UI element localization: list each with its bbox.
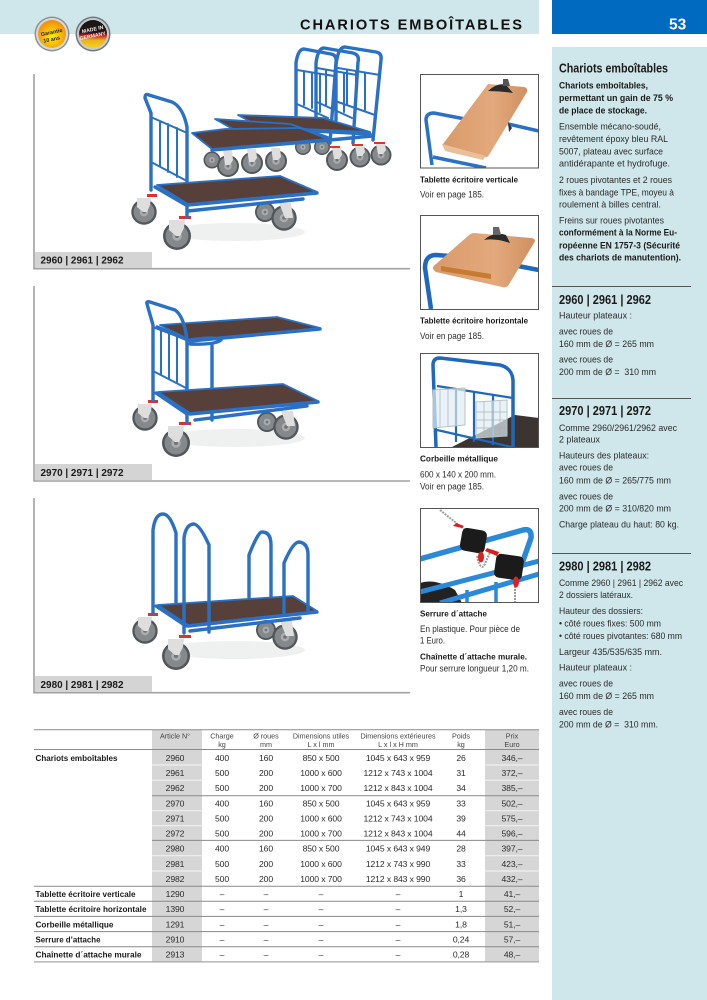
- title: CHARIOTS EMBOÎTABLES: [300, 15, 522, 33]
- table header: Dimensions extérieures: [360, 732, 436, 741]
- caption: horizontal tablet: [420, 316, 528, 341]
- table header: kg: [457, 740, 465, 749]
- table rows: –: [220, 934, 225, 944]
- side text: intro: des chariots de manutention).: [559, 253, 681, 264]
- table rows: 1212 x 843 x 1004: [363, 829, 433, 839]
- table rows: –: [264, 889, 269, 899]
- illustration: cart with side hoops: [132, 514, 317, 670]
- side section: 2980 2981 2982: Hauteur des dossiers:: [559, 606, 643, 617]
- row labels: Serrure d’attache: [36, 934, 101, 944]
- caption: vertical tablet: Tablette écritoire verticale: [420, 175, 518, 185]
- header band: [0, 0, 539, 34]
- thumbnail: coin lock: [421, 509, 538, 602]
- side section: 2960 2961 2962: avec roues de: [559, 327, 613, 338]
- table rows: 1,8: [455, 919, 467, 929]
- table rows: –: [264, 919, 269, 929]
- side text: intro: 2 roues pivotantes et 2 roues: [559, 175, 672, 186]
- table rows: 1000 x 600: [300, 814, 342, 824]
- table rows: 2961: [166, 768, 185, 778]
- table header: Charge: [210, 732, 234, 741]
- row labels: Chariots emboîtables: [36, 753, 118, 763]
- table rows: 372,–: [501, 768, 523, 778]
- table header: Poids: [452, 732, 470, 741]
- table rows: 200: [259, 859, 273, 869]
- caption: wire basket: 600 x 140 x 200 mm.: [420, 469, 496, 479]
- side section: 2960 2961 2962: 200 mm de Ø = 310 mm: [559, 367, 656, 378]
- price table: [34, 730, 539, 962]
- table header: L x l x H mm: [378, 740, 418, 749]
- table rows: 200: [259, 814, 273, 824]
- side text: intro: conformément à la Norme Eu-: [559, 228, 677, 239]
- table rows: 575,–: [501, 814, 523, 824]
- table rows: 500: [215, 859, 229, 869]
- label: 2970 2971 2972: 2970 | 2971 | 2972: [40, 467, 124, 479]
- table rows: [166, 753, 523, 960]
- table rows: 385,–: [501, 783, 523, 793]
- badge: made in Germany: MADE IN: [81, 25, 104, 35]
- table rows: 2971: [166, 814, 185, 824]
- table rows: 39: [456, 814, 466, 824]
- table rows: 1000 x 600: [300, 859, 342, 869]
- table rows: 1000 x 600: [300, 768, 342, 778]
- table rows: 57,–: [504, 934, 520, 944]
- table rows: 160: [259, 798, 273, 808]
- badge: guarantee 10 years: [34, 16, 70, 52]
- thumbnail: vertical writing tablet: [424, 79, 538, 168]
- table rows: 2972: [166, 829, 185, 839]
- side section: 2980 2981 2982: Largeur 435/535/635 mm.: [559, 647, 662, 658]
- side section: 2960 2961 2962: [552, 286, 691, 378]
- table rows: 31: [456, 768, 466, 778]
- table rows: 44: [456, 829, 466, 839]
- side section: 2980 2981 2982: 2980 | 2981 | 2982: [559, 560, 651, 574]
- side text: intro: Chariots emboîtables: [559, 62, 668, 76]
- table rows: 160: [259, 753, 273, 763]
- table rows: 0,28: [453, 950, 469, 960]
- table rows: 200: [259, 874, 273, 884]
- table rows: –: [220, 889, 225, 899]
- thumbnail: wire basket: [431, 356, 538, 447]
- caption: horizontal tablet: Tablette écritoire horizontale: [420, 316, 528, 326]
- table rows: 2970: [166, 798, 185, 808]
- thumbnail frame: [420, 354, 538, 448]
- caption: wire basket: Corbeille métallique: [420, 454, 498, 464]
- side section: 2970 2971 2972: avec roues de: [559, 463, 613, 474]
- side text: intro: ropéenne EN 1757-3 (Sécurité: [559, 240, 680, 251]
- side text: intro: permettant un gain de 75 %: [559, 93, 674, 104]
- table rows: 400: [215, 798, 229, 808]
- table header: [160, 732, 520, 749]
- table rows: –: [220, 919, 225, 929]
- page number tab: [552, 0, 707, 34]
- table rows: –: [396, 889, 401, 899]
- table rows: 1000 x 700: [300, 874, 342, 884]
- table rows: 500: [215, 814, 229, 824]
- side section: 2980 2981 2982: [552, 553, 691, 730]
- table header: kg: [218, 740, 226, 749]
- table rows: 400: [215, 844, 229, 854]
- table rows: 1212 x 743 x 1004: [363, 768, 433, 778]
- table rows: 2913: [166, 950, 185, 960]
- side section: 2980 2981 2982: • côté roues pivotantes: 680 mm: [559, 631, 682, 642]
- table rows: 1291: [166, 919, 185, 929]
- table header: Dimensions utiles: [293, 732, 350, 741]
- side section: 2960 2961 2962: avec roues de: [559, 354, 613, 365]
- table rows: 500: [215, 783, 229, 793]
- side text: intro: roulement à billes central.: [559, 199, 661, 210]
- row labels: Tablette écritoire verticale: [36, 889, 136, 899]
- row labels: Chaînette d´attache murale: [36, 950, 142, 960]
- table rows: 2962: [166, 783, 185, 793]
- table rows: 1000 x 700: [300, 783, 342, 793]
- table rows: 1212 x 743 x 990: [366, 859, 430, 869]
- panel: cart 2980 2981 2982: [34, 498, 410, 693]
- label: 2960 2961 2962: 2960 | 2961 | 2962: [40, 254, 124, 266]
- side section: 2980 2981 2982: 160 mm de Ø = 265 mm: [559, 691, 654, 702]
- table rows: 1212 x 743 x 1004: [363, 814, 433, 824]
- caption: coin lock and chain: En plastique. Pour pièce de: [420, 624, 520, 634]
- side text: intro: Freins sur roues pivotantes: [559, 215, 664, 226]
- thumbnail frame: [420, 216, 538, 310]
- table rows: 502,–: [501, 798, 523, 808]
- table rows: 596,–: [501, 829, 523, 839]
- table rows: 500: [215, 874, 229, 884]
- side section: 2960 2961 2962: 2960 | 2961 | 2962: [559, 293, 651, 307]
- table rows: –: [396, 950, 401, 960]
- side section: 2970 2971 2972: Comme 2960/2961/2962 avec: [559, 423, 677, 434]
- table rows: –: [319, 950, 324, 960]
- table rows: 0,24: [453, 934, 469, 944]
- label: 2980 2981 2982: [35, 676, 152, 692]
- table rows: 51,–: [504, 919, 520, 929]
- table rows: 160: [259, 844, 273, 854]
- side section: 2970 2971 2972: 200 mm de Ø = 310/820 mm: [559, 504, 671, 515]
- table rows: –: [264, 950, 269, 960]
- side section: 2980 2981 2982: Comme 2960 | 2961 | 2962 avec: [559, 578, 683, 589]
- table rows: 1212 x 843 x 990: [366, 874, 430, 884]
- caption: coin lock and chain: Serrure d´attache: [420, 609, 487, 619]
- table rows: 200: [259, 783, 273, 793]
- table rows: 48,–: [504, 950, 520, 960]
- side section: 2970 2971 2972: Charge plateau du haut: 80 kg.: [559, 520, 679, 531]
- table rows: 1,3: [455, 904, 467, 914]
- table rows: –: [396, 919, 401, 929]
- badge: made in Germany: GERMANY: [79, 31, 107, 42]
- table rows: –: [264, 934, 269, 944]
- side text: intro: de place de stockage.: [559, 105, 647, 116]
- badge: made in Germany: [76, 16, 110, 52]
- caption: vertical tablet: Voir en page 185.: [420, 190, 484, 200]
- side section: 2970 2971 2972: avec roues de: [559, 491, 613, 502]
- table header: Prix: [506, 732, 519, 741]
- table rows: –: [396, 904, 401, 914]
- table rows: –: [319, 889, 324, 899]
- caption: vertical tablet: [420, 175, 518, 200]
- table rows: 1: [459, 889, 464, 899]
- thumbnail frame: [420, 508, 538, 602]
- side text: intro: Ensemble mécano-soudé,: [559, 121, 661, 132]
- table rows: 41,–: [504, 889, 520, 899]
- table rows: 1045 x 643 x 949: [366, 844, 430, 854]
- table rows: 1290: [166, 889, 185, 899]
- side text: intro: 5007, plateau avec surface: [559, 146, 663, 157]
- side section: 2970 2971 2972: 2970 | 2971 | 2972: [559, 404, 651, 418]
- side section: 2970 2971 2972: Hauteurs des plateaux:: [559, 450, 649, 461]
- caption: wire basket: Voir en page 185.: [420, 481, 484, 491]
- table rows: 2910: [166, 934, 185, 944]
- side section: 2970 2971 2972: [552, 398, 691, 531]
- table rows: 52,–: [504, 904, 520, 914]
- side section: 2980 2981 2982: 2 dossiers latéraux.: [559, 590, 633, 601]
- side section: 2980 2981 2982: • côté roues fixes: 500 mm: [559, 619, 661, 630]
- side section: 2980 2981 2982: avec roues de: [559, 679, 613, 690]
- table rows: 432,–: [501, 874, 523, 884]
- table rows: 1000 x 700: [300, 829, 342, 839]
- caption: coin lock and chain: 1 Euro.: [420, 636, 445, 646]
- side text: intro: revêtement époxy bleu RAL: [559, 134, 668, 145]
- page number tab: 53: [669, 16, 687, 34]
- table rows: 500: [215, 768, 229, 778]
- label: 2980 2981 2982: 2980 | 2981 | 2982: [40, 679, 124, 691]
- thumbnail: horizontal writing tablet: [422, 227, 538, 309]
- table rows: 423,–: [501, 859, 523, 869]
- label: 2970 2971 2972: [35, 464, 152, 480]
- table rows: 200: [259, 829, 273, 839]
- table rows: 2980: [166, 844, 185, 854]
- side section: 2960 2961 2962: Hauteur plateaux :: [559, 311, 632, 322]
- table rows: 1045 x 643 x 959: [366, 753, 430, 763]
- side section: 2980 2981 2982: Hauteur plateaux :: [559, 663, 632, 674]
- table rows: 2982: [166, 874, 185, 884]
- panel: cart 2960 2961 2962: [34, 47, 410, 269]
- table rows: 34: [456, 783, 466, 793]
- side text: intro: antidérapante et hydrofuge.: [559, 159, 670, 170]
- table rows: 500: [215, 829, 229, 839]
- side text: intro: Chariots emboîtables,: [559, 80, 648, 91]
- caption: coin lock and chain: Pour serrure longueur 1,20 m.: [420, 663, 529, 673]
- table rows: –: [319, 934, 324, 944]
- table rows: –: [220, 904, 225, 914]
- table rows: 346,–: [501, 753, 523, 763]
- illustration: nested carts: [131, 47, 392, 250]
- table header: Ø roues: [253, 732, 279, 741]
- table rows: 28: [456, 844, 466, 854]
- table rows: 1212 x 843 x 1004: [363, 783, 433, 793]
- table rows: 33: [456, 859, 466, 869]
- table rows: –: [319, 919, 324, 929]
- row labels: Corbeille métallique: [36, 919, 114, 929]
- table header: mm: [260, 740, 272, 749]
- side section: 2980 2981 2982: avec roues de: [559, 707, 613, 718]
- caption: coin lock and chain: [420, 609, 529, 673]
- table rows: 850 x 500: [303, 798, 340, 808]
- table rows: 2960: [166, 753, 185, 763]
- row labels: Tablette écritoire horizontale: [36, 904, 147, 914]
- side section: 2970 2971 2972: 160 mm de Ø = 265/775 mm: [559, 475, 671, 486]
- table rows: 1390: [166, 904, 185, 914]
- table rows: 397,–: [501, 844, 523, 854]
- side section: 2960 2961 2962: 160 mm de Ø = 265 mm: [559, 339, 654, 350]
- row labels: [36, 753, 147, 960]
- table rows: –: [319, 904, 324, 914]
- panel: cart 2970 2971 2972: [34, 286, 410, 481]
- side section: 2970 2971 2972: 2 plateaux: [559, 435, 600, 446]
- side panel background: [552, 47, 707, 1000]
- table rows: 2981: [166, 859, 185, 869]
- table rows: –: [264, 904, 269, 914]
- table rows: 36: [456, 874, 466, 884]
- table header: Article N°: [160, 732, 190, 741]
- side text: intro: [559, 62, 681, 264]
- badge: guarantee 10 years: 10 ans: [43, 35, 61, 45]
- caption: wire basket: [420, 454, 498, 491]
- illustration: two-shelf cart: [132, 302, 320, 457]
- table rows: 850 x 500: [303, 844, 340, 854]
- table rows: 200: [259, 768, 273, 778]
- table header: L x l mm: [308, 740, 334, 749]
- side text: intro: fixes à bandage TPE, moyeu à: [559, 187, 675, 198]
- caption: coin lock and chain: Chaînette d´attache murale.: [420, 652, 527, 662]
- caption: horizontal tablet: Voir en page 185.: [420, 331, 484, 341]
- badge: guarantee 10 years: Garantie: [40, 28, 63, 38]
- table rows: 26: [456, 753, 466, 763]
- side section: 2980 2981 2982: 200 mm de Ø = 310 mm.: [559, 719, 658, 730]
- table rows: 850 x 500: [303, 753, 340, 763]
- table rows: 33: [456, 798, 466, 808]
- table rows: 1045 x 643 x 959: [366, 798, 430, 808]
- table rows: 400: [215, 753, 229, 763]
- table rows: –: [396, 934, 401, 944]
- table rows: –: [220, 950, 225, 960]
- label: 2960 2961 2962: [35, 252, 152, 268]
- table header: Euro: [504, 740, 520, 749]
- thumbnail frame: [420, 74, 538, 168]
